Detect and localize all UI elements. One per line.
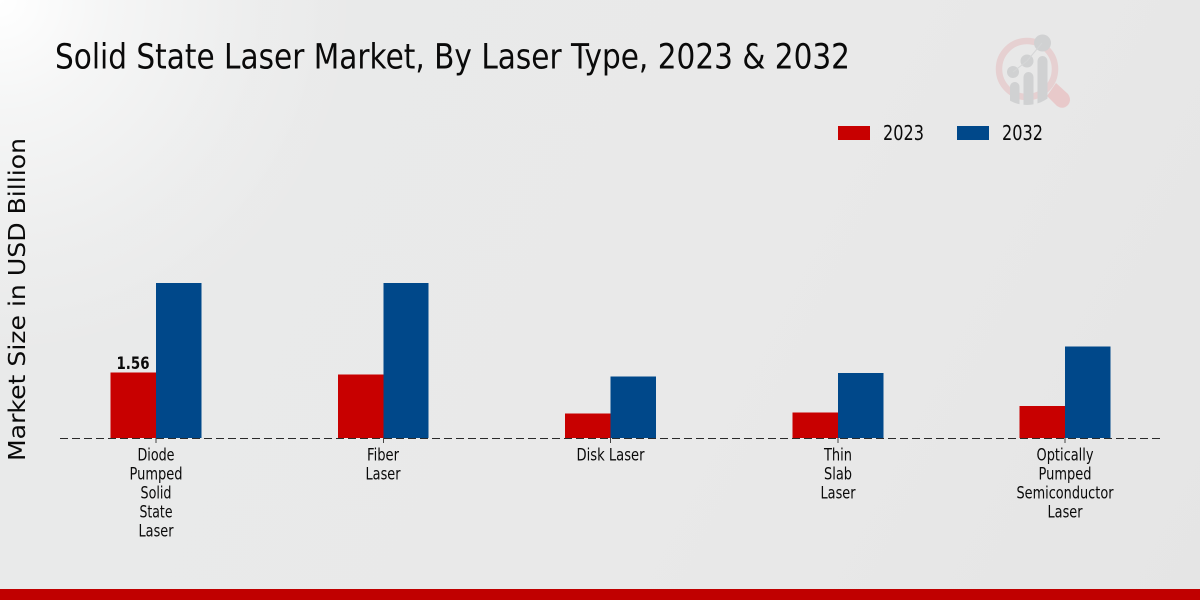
label: Diode Pumped Solid State Laser xyxy=(130,446,182,540)
label: Diode Pumped Solid State Laser: State xyxy=(140,502,172,522)
bars: Disk Laser xyxy=(565,376,656,438)
value label: 1.56: 1.56 xyxy=(116,354,150,373)
y-axis title: Market Size in USD Billion xyxy=(3,138,31,461)
label: Diode Pumped Solid State Laser: Laser xyxy=(138,522,174,540)
x-axis labels xyxy=(130,446,1114,540)
bars: Fiber Laser xyxy=(338,283,428,438)
x-axis ticks xyxy=(156,438,1065,443)
label: Diode Pumped Solid State Laser: Pumped xyxy=(130,464,182,484)
title: Solid State Laser Market, By Laser Type, 2023 & 2032 xyxy=(55,38,850,78)
legend xyxy=(838,121,1043,145)
bars: Diode Pumped Solid State Laser xyxy=(110,283,202,438)
label: Fiber Laser xyxy=(366,446,401,484)
x-axis baseline xyxy=(60,438,1160,440)
label: Thin Slab Laser: Slab xyxy=(824,464,852,484)
legend item: 2023 xyxy=(838,121,924,145)
label: Optically Pumped Semiconductor Laser: Optically xyxy=(1036,446,1094,464)
label: Thin Slab Laser: Laser xyxy=(820,484,856,502)
label: Optically Pumped Semiconductor Laser: Laser xyxy=(1048,502,1083,522)
legend item: 2032 xyxy=(957,121,1043,145)
label: Diode Pumped Solid State Laser: Solid xyxy=(140,484,172,502)
label: Optically Pumped Semiconductor Laser xyxy=(1016,446,1114,522)
label: Thin Slab Laser xyxy=(820,446,856,502)
label: Disk Laser: Disk Laser xyxy=(576,446,645,464)
label: Optically Pumped Semiconductor Laser: Pumped xyxy=(1038,464,1092,484)
bar chart xyxy=(60,283,1160,443)
legend item: 2032: 2032 xyxy=(1002,121,1043,145)
legend item: 2023: 2023 xyxy=(883,121,924,145)
bars: Thin Slab Laser xyxy=(792,373,884,438)
label: Fiber Laser: Laser xyxy=(366,464,401,484)
bars: Optically Pumped Semiconductor Laser xyxy=(1020,346,1110,438)
label: Thin Slab Laser: Thin xyxy=(823,446,852,464)
icon: watermark logo xyxy=(999,34,1070,112)
label: Diode Pumped Solid State Laser: Diode xyxy=(138,446,174,464)
label: Optically Pumped Semiconductor Laser: Semiconductor xyxy=(1016,484,1114,502)
footer bar xyxy=(0,589,1200,600)
label: Fiber Laser: Fiber xyxy=(367,446,399,464)
